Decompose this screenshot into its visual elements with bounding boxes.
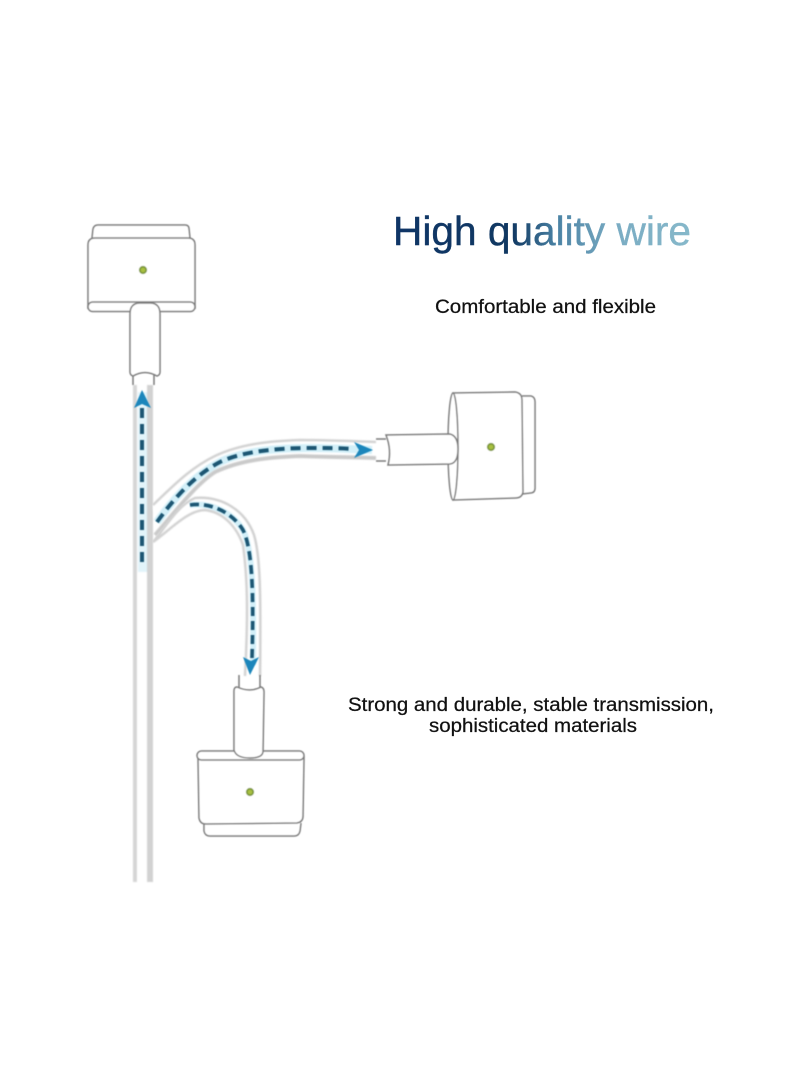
lower branch cable bbox=[153, 498, 260, 676]
upper branch cable bbox=[153, 440, 376, 535]
caption: strong and durable: Strong and durable, stable transmission, bbox=[348, 695, 714, 716]
caption: comfortable and flexible: Comfortable and flexible bbox=[435, 297, 656, 318]
caption: strong and durable bbox=[348, 695, 714, 737]
status light bbox=[488, 444, 494, 450]
flow arrow: to right connector bbox=[157, 442, 373, 522]
top connector bbox=[88, 225, 195, 385]
flow arrow: to bottom connector bbox=[190, 504, 259, 675]
status light bbox=[247, 789, 253, 795]
status light bbox=[140, 267, 146, 273]
caption: strong and durable: sophisticated materials bbox=[429, 716, 637, 737]
flow arrow: up to top connector bbox=[134, 390, 151, 568]
title: High quality wire bbox=[393, 208, 691, 254]
bottom connector bbox=[197, 675, 304, 836]
main vertical cable bbox=[133, 385, 153, 882]
right connector bbox=[376, 392, 535, 500]
